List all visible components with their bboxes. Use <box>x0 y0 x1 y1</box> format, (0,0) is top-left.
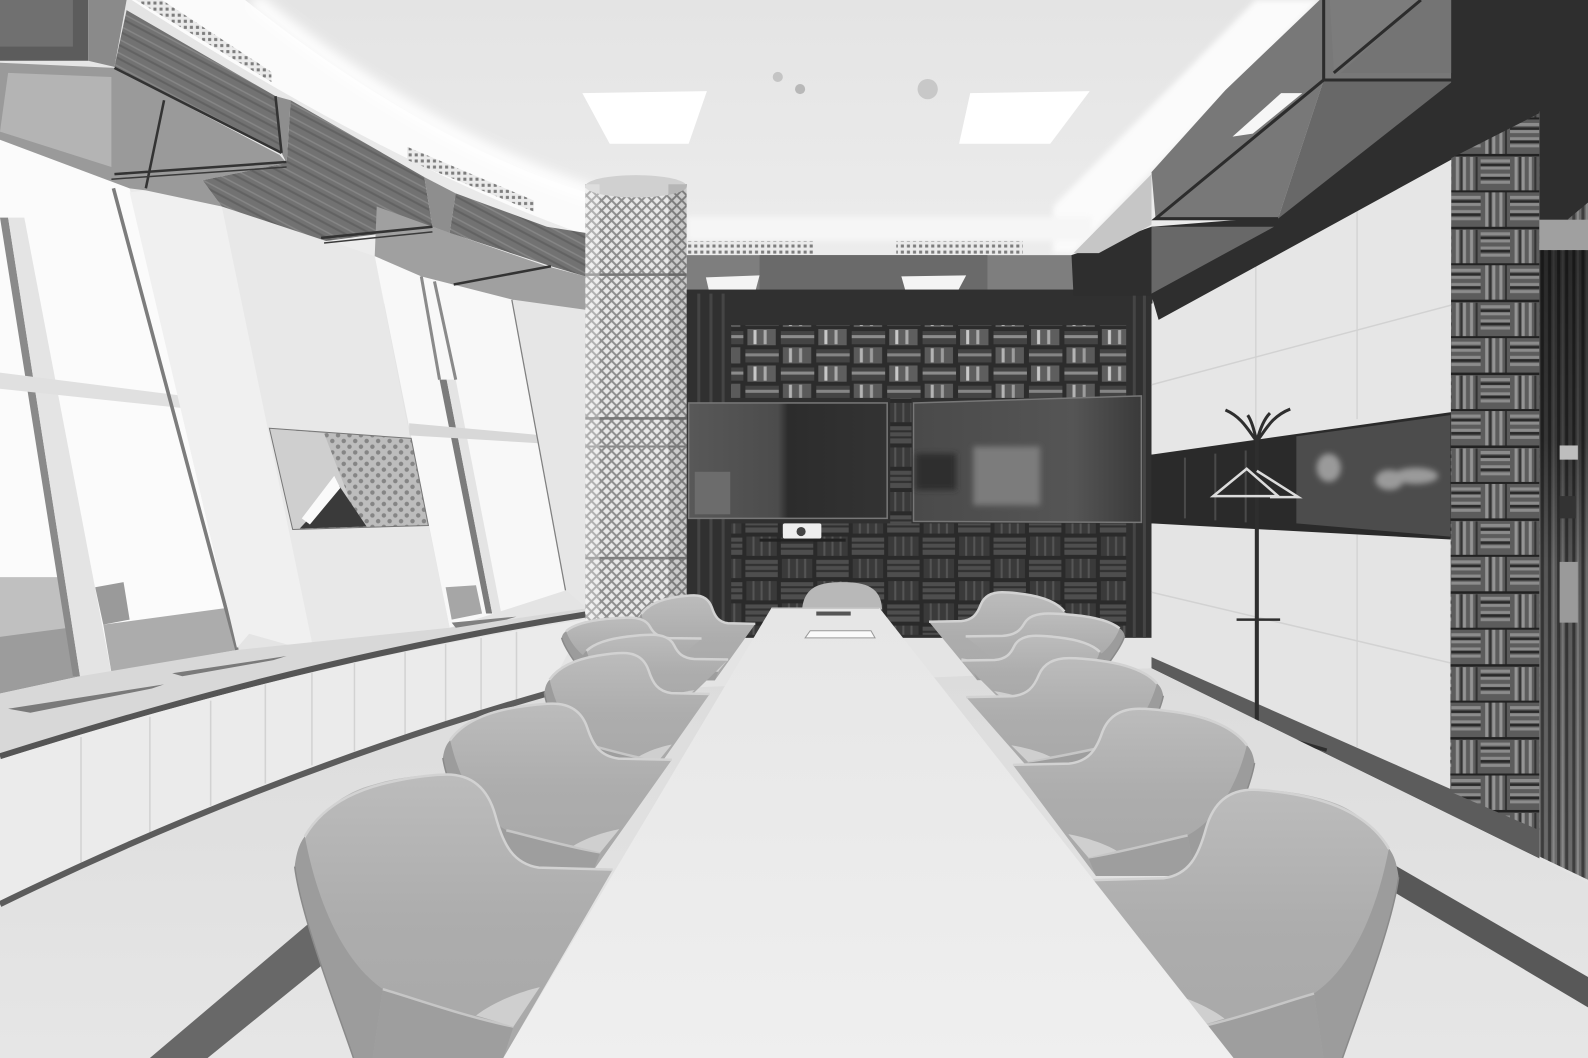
coat rack <box>1213 409 1327 750</box>
ceiling <box>0 0 1588 304</box>
back wall with woven panels <box>685 290 1153 638</box>
lower cabinet <box>0 620 585 904</box>
right wall panels <box>1152 157 1539 859</box>
left glass soffit <box>0 0 585 310</box>
left chairs <box>295 595 755 1058</box>
column <box>585 175 687 650</box>
right pillar <box>1450 0 1588 880</box>
left windows <box>0 140 566 694</box>
window sill <box>0 608 585 756</box>
projector <box>760 523 846 542</box>
conference table <box>503 607 1234 1058</box>
floor inlay stripes <box>150 866 1588 1058</box>
right upper glass fascia <box>1071 0 1539 320</box>
ceiling light panels <box>582 72 1090 144</box>
right chairs <box>929 592 1399 1058</box>
left wall piers <box>130 190 585 652</box>
floor <box>0 668 1588 1058</box>
back soffit and vents <box>687 241 1082 296</box>
back centre chair <box>802 582 882 609</box>
table documents <box>772 607 879 638</box>
ceiling glow bands <box>132 0 1320 253</box>
wall mirror panel <box>269 428 428 530</box>
televisions <box>689 396 1141 522</box>
